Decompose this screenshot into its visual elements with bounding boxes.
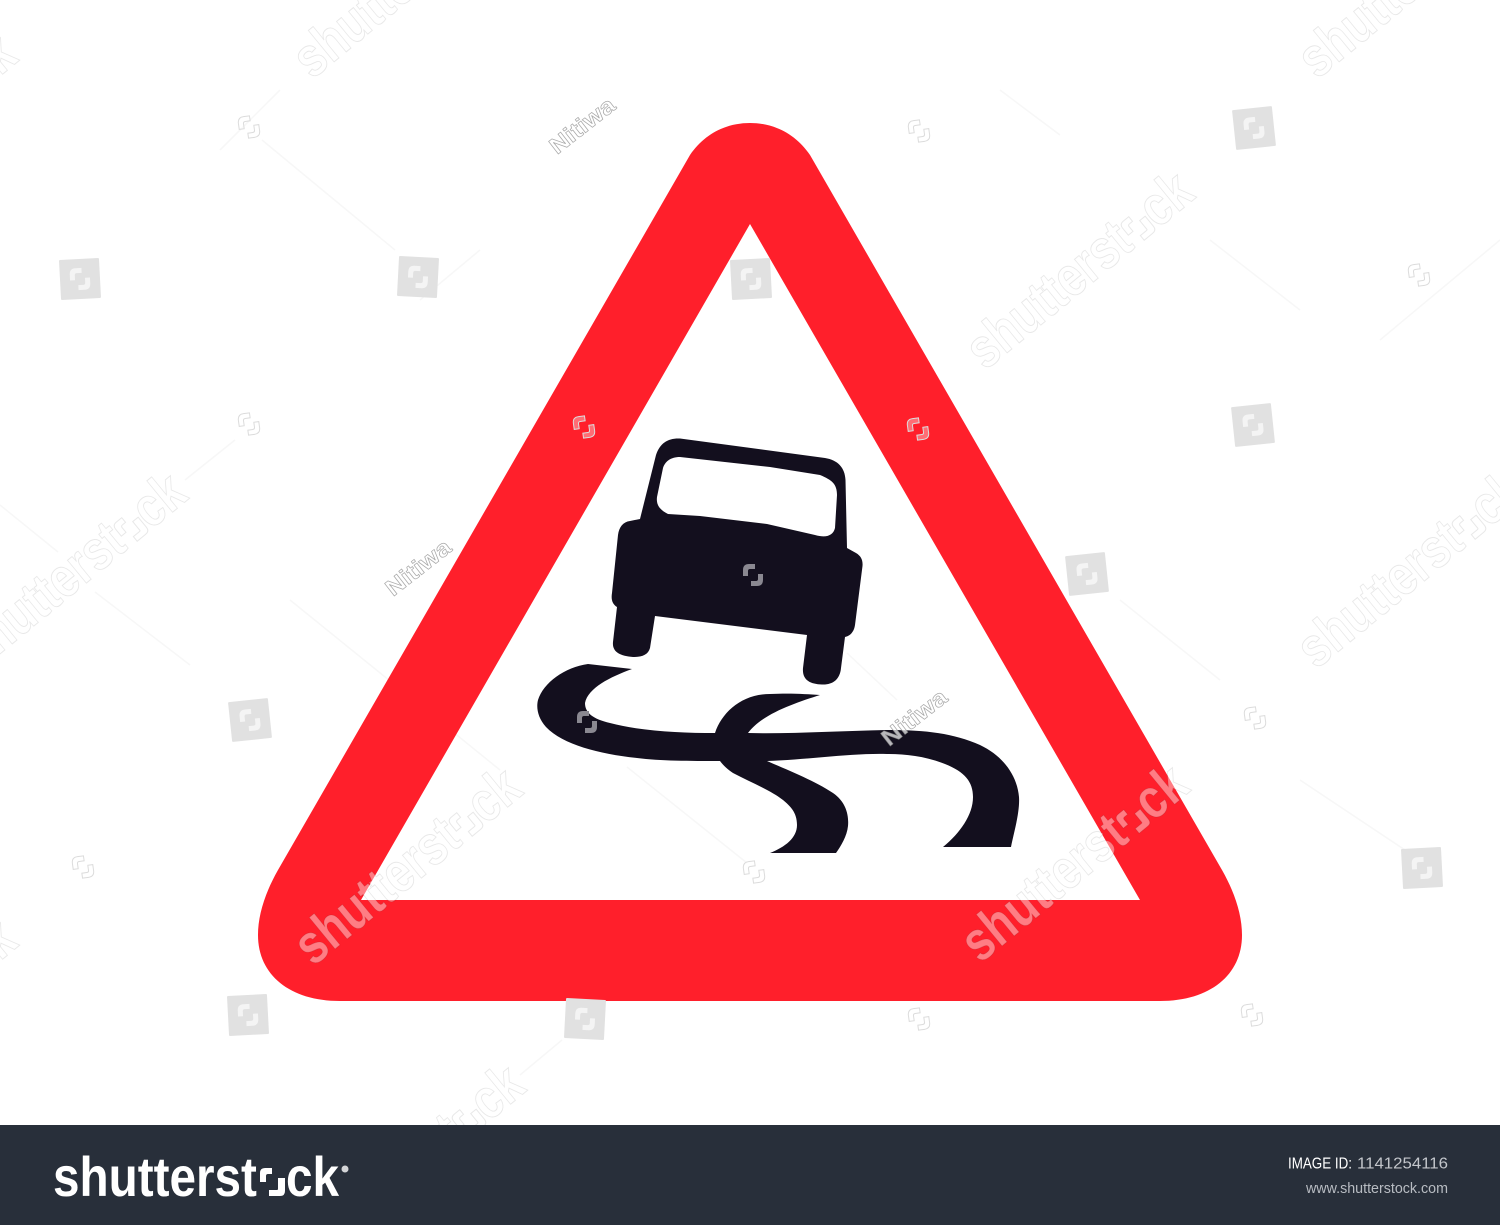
watermark: repeated wordmarks: Nitiwa [544,92,620,159]
watermark: repeated wordmarks: shutterstock [948,750,1200,973]
website url: www.shutterstock.com [1305,1181,1448,1197]
icon: skid marks [537,664,1019,853]
watermark: repeated wordmarks: shutterstock [281,753,533,976]
footer wordmark: shutterstock [53,1145,340,1208]
watermark: repeated wordmarks: Nitiwa [380,534,456,601]
image id number: 1141254116 [1357,1156,1448,1172]
watermark: logo marks on the black car and road [577,564,763,733]
watermark: repeated wordmarks: Nitiwa [876,684,952,751]
watermark: grey square logo tiles [59,106,1443,1040]
warning sign: red triangle with skidding car [258,123,1242,1001]
watermark: outlined logo marks [72,115,1430,1031]
watermark: repeated wordmarks: shutterstock [953,157,1205,380]
image id: IMAGE ID: [1288,1156,1352,1172]
footer bar [0,1125,1500,1225]
red triangle border [258,123,1242,1001]
icon: car front view, tilted [612,438,863,685]
